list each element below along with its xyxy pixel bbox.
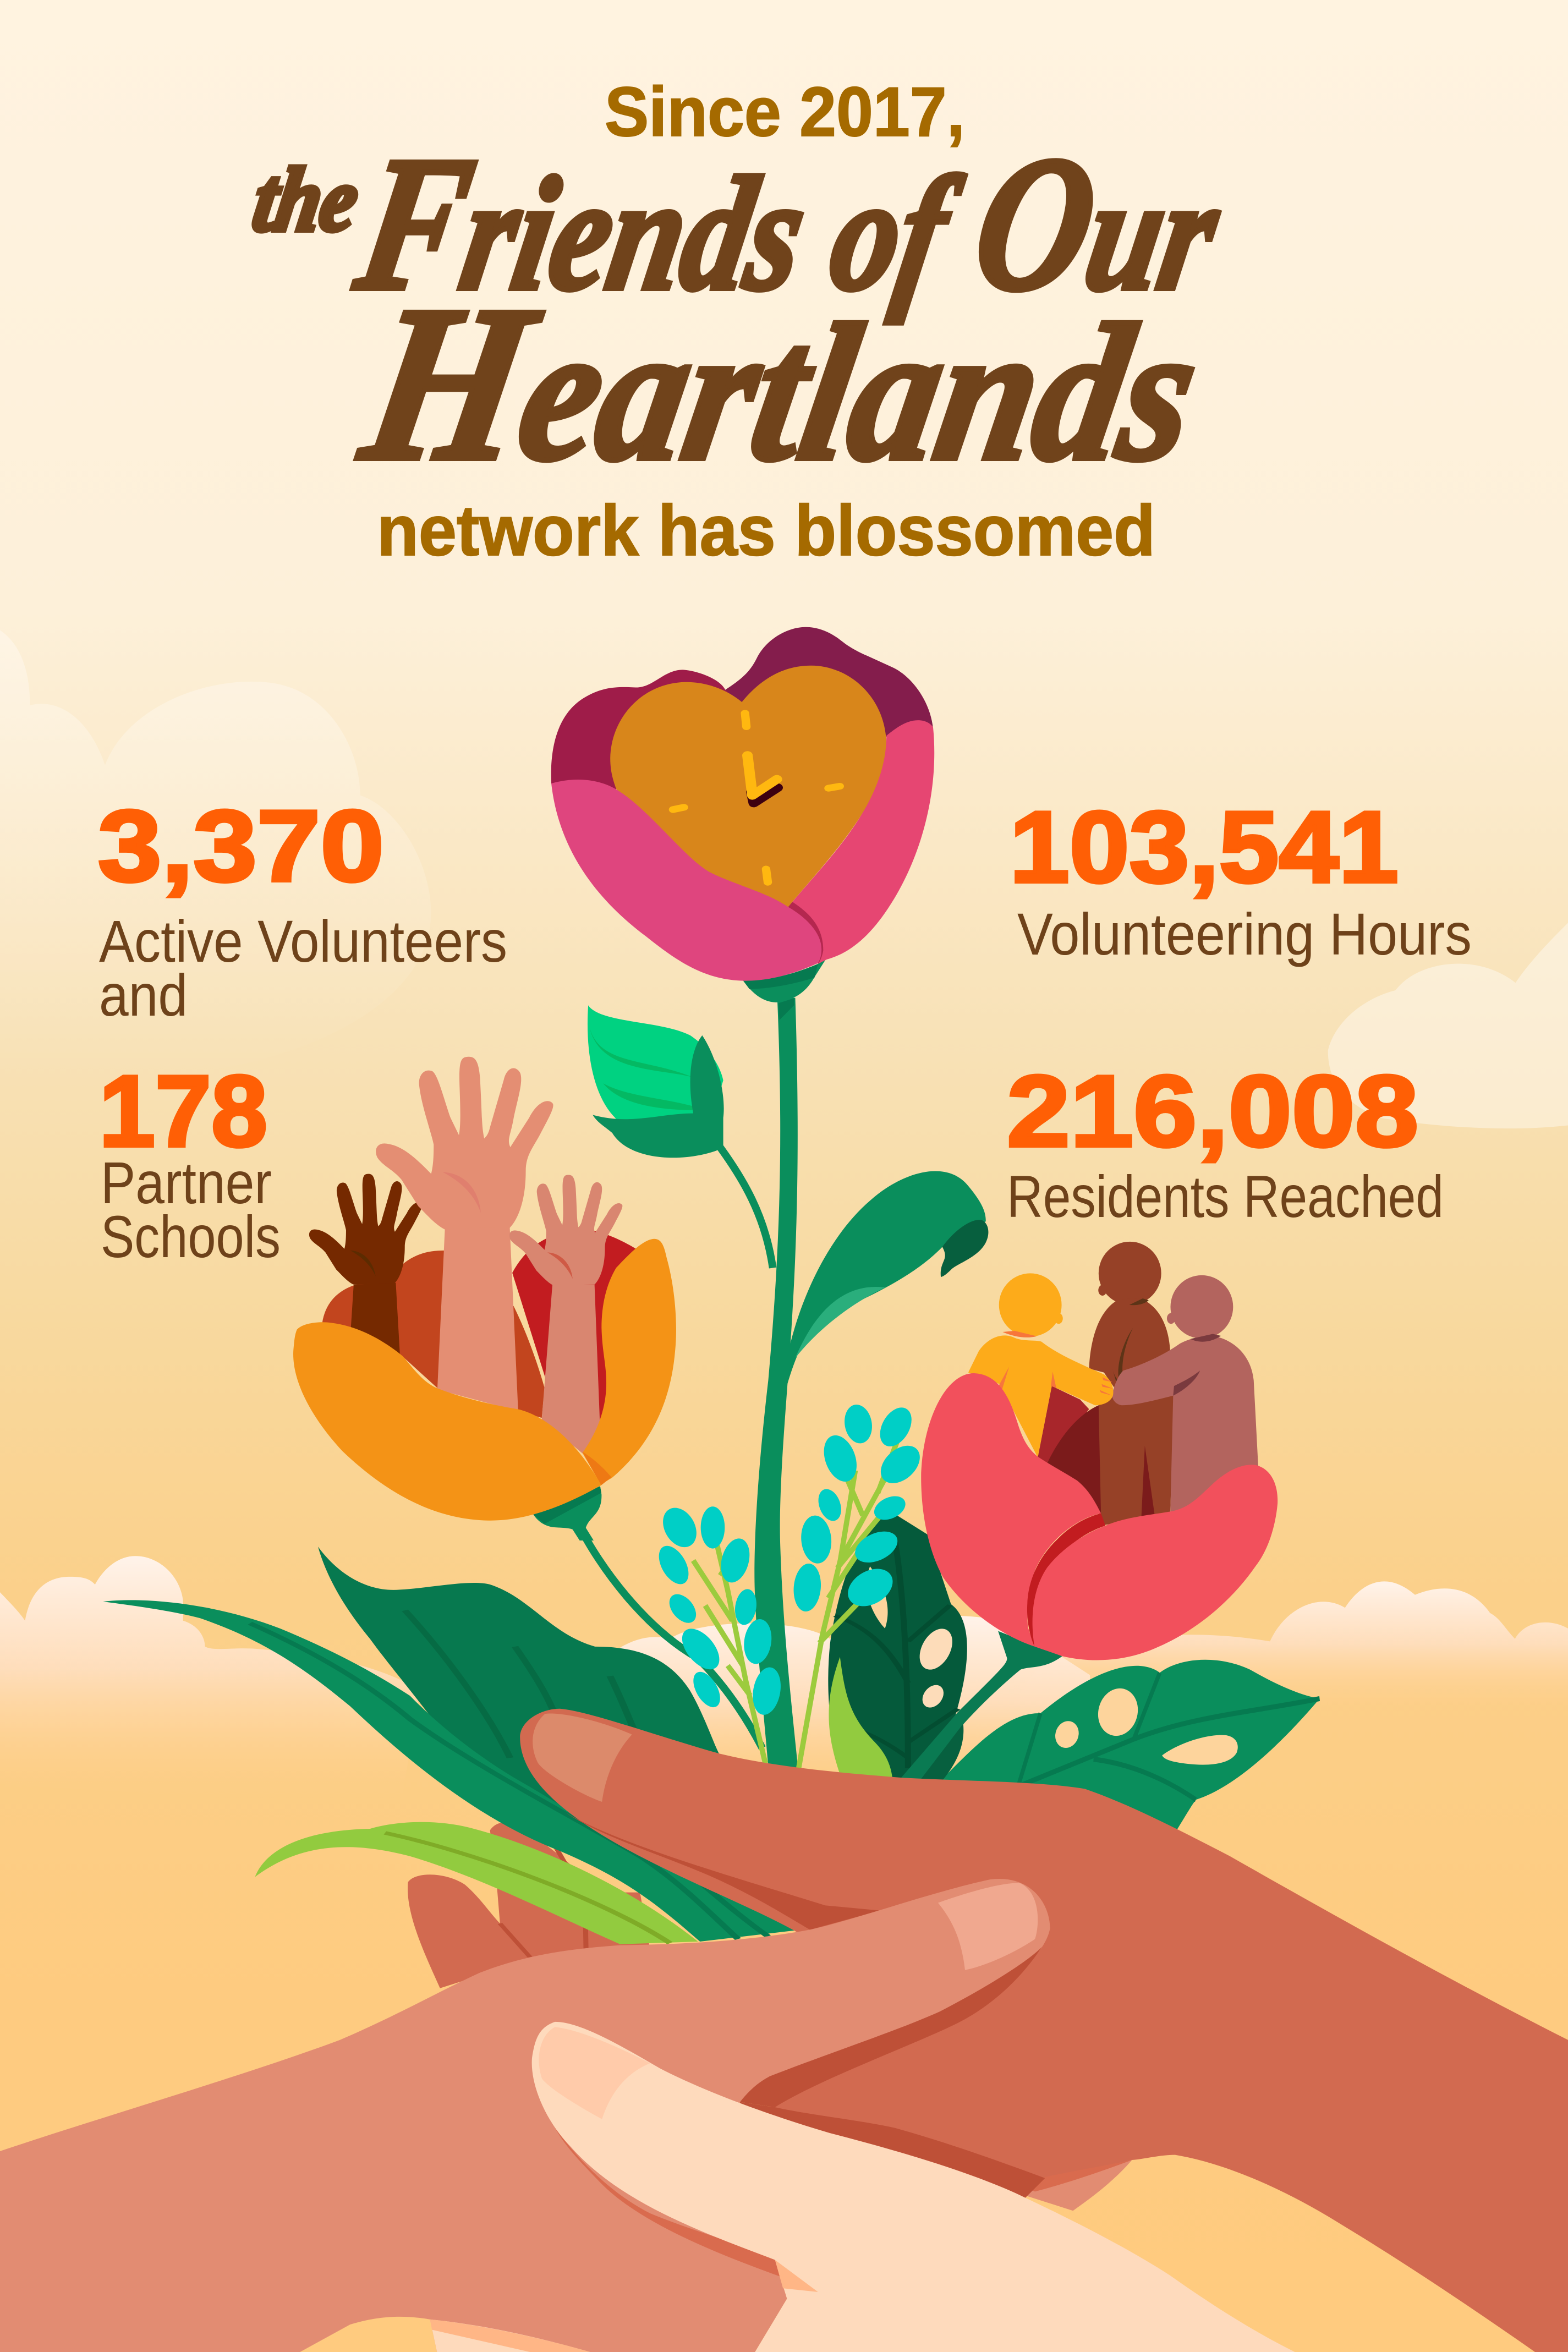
leaf: bright green upper — [588, 1005, 723, 1141]
stat number 216,008: 216,008 — [1007, 1054, 1418, 1167]
front petal — [293, 1322, 601, 1521]
clock hands shadow — [752, 788, 777, 803]
shadow under middle thumb — [740, 1947, 1042, 2107]
large hand crease — [443, 1172, 481, 1213]
label partner: Partner — [101, 1149, 272, 1216]
stat number 103,541: 103,541 — [1010, 790, 1399, 903]
finger creases — [500, 1846, 586, 1957]
leaf: lime — [255, 1822, 698, 1944]
right petal — [583, 1239, 676, 1484]
dark interior — [1048, 1403, 1158, 1519]
calyx — [533, 1486, 601, 1540]
heart clock face — [610, 666, 886, 907]
palm sliver — [1000, 2160, 1132, 2211]
stem: main — [754, 998, 800, 1785]
bouquet — [0, 627, 1568, 2352]
calyx — [743, 960, 826, 1002]
light hand — [532, 2022, 1295, 2352]
leaf: spotted right — [941, 1660, 1320, 1851]
leaf: highlight — [795, 1287, 885, 1358]
left petal — [921, 1373, 1101, 1647]
leaf: large dark left — [318, 1547, 720, 1830]
leaf: sepal — [593, 1035, 724, 1158]
petal crease — [788, 902, 823, 964]
person: mauve — [1112, 1275, 1258, 1519]
tulip with heart clock — [551, 627, 934, 1002]
small hand — [509, 1175, 622, 1455]
front petal — [551, 780, 821, 981]
lime vein — [385, 1833, 670, 1943]
palm sliver shade — [1015, 2160, 1132, 2191]
stem: red flower stalk — [901, 1631, 1062, 1781]
crease under light hand — [555, 2128, 780, 2277]
leaf veins — [250, 1624, 768, 1939]
middle thumb nail — [938, 1883, 1038, 1970]
large hand — [376, 1057, 553, 1411]
back fingers and front leaves — [103, 1600, 810, 1988]
heading: since 2017: Since 2017, — [605, 73, 965, 151]
label volunteering hours: Volunteering Hours — [1017, 901, 1472, 967]
back fingers — [408, 1822, 650, 1988]
red flower with people — [921, 1242, 1278, 1660]
label and: and — [99, 962, 188, 1028]
stat: hours and residents — [1007, 790, 1472, 1230]
dark hand crease — [350, 1251, 376, 1276]
stat number 178: 178 — [99, 1054, 267, 1167]
back petal rust — [322, 1251, 545, 1418]
label residents reached: Residents Reached — [1007, 1163, 1444, 1230]
leaf: light green small — [829, 1657, 893, 1789]
leaf: dark monstera — [828, 1508, 967, 1789]
leaf: long green — [103, 1600, 810, 1942]
shadow along wrist — [740, 2102, 1045, 2208]
label schools: Schools — [101, 1203, 281, 1270]
orange flower with raised hands — [293, 1057, 676, 1540]
red interior — [1038, 1386, 1089, 1463]
stems and upper leaves — [578, 998, 988, 1785]
sprigs of teal buds — [653, 1402, 927, 1770]
back petal red — [512, 1231, 637, 1423]
stem base of tulip — [778, 998, 794, 1020]
back petal left — [551, 670, 741, 791]
clock ticks — [673, 713, 840, 882]
heading: network has blossomed: network has blossomed — [377, 490, 1155, 571]
middle hand — [0, 1879, 1050, 2352]
light hand peach notch — [775, 2260, 818, 2292]
person: brown — [1089, 1242, 1174, 1525]
calyx shade — [533, 1486, 601, 1524]
back petal right — [725, 627, 933, 737]
calyx shade — [743, 964, 818, 989]
title block — [247, 73, 1237, 571]
label active volunteers: Active Volunteers — [99, 908, 507, 974]
right hand — [520, 1709, 1568, 2352]
stat: volunteers and schools — [98, 789, 507, 1270]
petal crease — [1027, 1514, 1105, 1647]
lower clouds — [0, 1556, 1568, 1810]
stat number 3,370: 3,370 — [98, 789, 384, 902]
upper clouds — [0, 630, 1568, 1128]
leaf: large right — [780, 1171, 986, 1411]
stem: orange flower branch — [578, 1523, 762, 1748]
leaf: fold — [941, 1220, 988, 1277]
stem: leaf branch — [717, 1143, 773, 1268]
shadow under right thumb — [565, 1812, 880, 1929]
right petal — [1033, 1465, 1278, 1660]
dark hand — [309, 1174, 423, 1356]
heading: the: the — [247, 149, 365, 250]
right thumb nail — [533, 1714, 632, 1802]
lower wrist — [430, 2320, 590, 2352]
petal crease — [583, 1452, 611, 1485]
hands — [0, 1709, 1568, 2352]
right petal — [788, 720, 934, 964]
person: yellow — [968, 1273, 1114, 1457]
heading: heartlands: Heartlands — [346, 260, 1217, 507]
heading: friends of our: Friends of Our — [342, 117, 1237, 330]
teal buds — [653, 1402, 927, 1717]
sprig stems — [693, 1433, 900, 1770]
lower wrist band — [430, 2320, 590, 2352]
light thumb nail — [539, 2027, 650, 2119]
small hand crease — [547, 1253, 573, 1279]
leaf stripes — [590, 1028, 705, 1110]
clock hands — [748, 755, 777, 796]
